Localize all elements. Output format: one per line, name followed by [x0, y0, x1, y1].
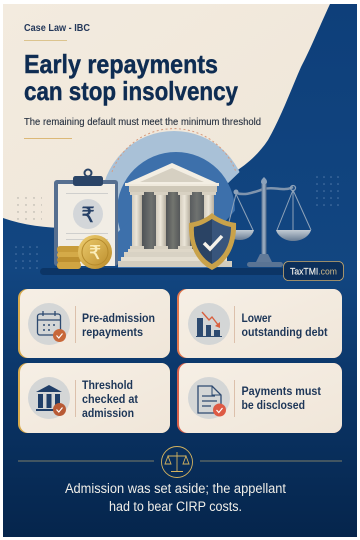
- card: threshold checked at admission: [18, 363, 170, 433]
- icon: calendar: [28, 303, 70, 345]
- card: lower outstanding debt: outstanding debt: [242, 327, 328, 339]
- title: Early repayments: [24, 49, 218, 79]
- brand badge: TaxTMI.com: [290, 266, 337, 278]
- dot grid: cream area: [16, 194, 42, 220]
- card: payments must be disclosed: [177, 363, 342, 433]
- conclusion text: had to bear CIRP costs.: [109, 499, 242, 514]
- card: payments must be disclosed: be disclosed: [242, 400, 305, 412]
- card: lower outstanding debt: [177, 289, 342, 358]
- card: pre-admission repayments: [18, 289, 170, 358]
- dot grid: upper right: [314, 175, 344, 211]
- illustration: clipboard with rupee: [54, 170, 118, 266]
- illustration: clipboard with rupee: ₹: [81, 204, 95, 227]
- conclusion text: [65, 481, 286, 514]
- dot grid: lower left: [15, 241, 43, 271]
- illustration: gold coins: ₹: [89, 243, 101, 264]
- gold rule: [24, 40, 67, 41]
- card: pre-admission repayments: Pre-admission: [82, 313, 155, 325]
- icon: document: [188, 377, 230, 419]
- illustration: courthouse: [118, 163, 232, 267]
- card: pre-admission repayments: repayments: [82, 327, 143, 339]
- card: threshold checked at admission: Threshold: [82, 380, 133, 392]
- card: threshold checked at admission: admission: [82, 408, 134, 420]
- title: [24, 49, 238, 106]
- icon: institution: [28, 377, 70, 419]
- illustration: shield: [189, 213, 236, 270]
- icon: falling bar chart: [188, 303, 230, 345]
- illustration: arch: [105, 128, 240, 268]
- brand badge: [284, 262, 344, 280]
- illustration: gold coins: [57, 235, 112, 269]
- card: threshold checked at admission: checked at: [82, 394, 138, 406]
- cream header panel: [3, 4, 330, 228]
- eyebrow label: Case Law - IBC: [24, 23, 90, 34]
- subtitle: The remaining default must meet the minimum threshold: [24, 116, 261, 128]
- illustration: scales of justice: [226, 177, 311, 267]
- title: can stop insolvency: [24, 76, 238, 106]
- gold rule: [24, 138, 72, 139]
- conclusion text: Admission was set aside; the appellant: [65, 481, 286, 496]
- footer divider lines: [18, 460, 342, 462]
- card: payments must be disclosed: Payments must: [242, 386, 321, 398]
- icon: footer scales: [162, 446, 192, 478]
- ground shadow: [40, 268, 295, 275]
- card: lower outstanding debt: Lower: [242, 313, 272, 325]
